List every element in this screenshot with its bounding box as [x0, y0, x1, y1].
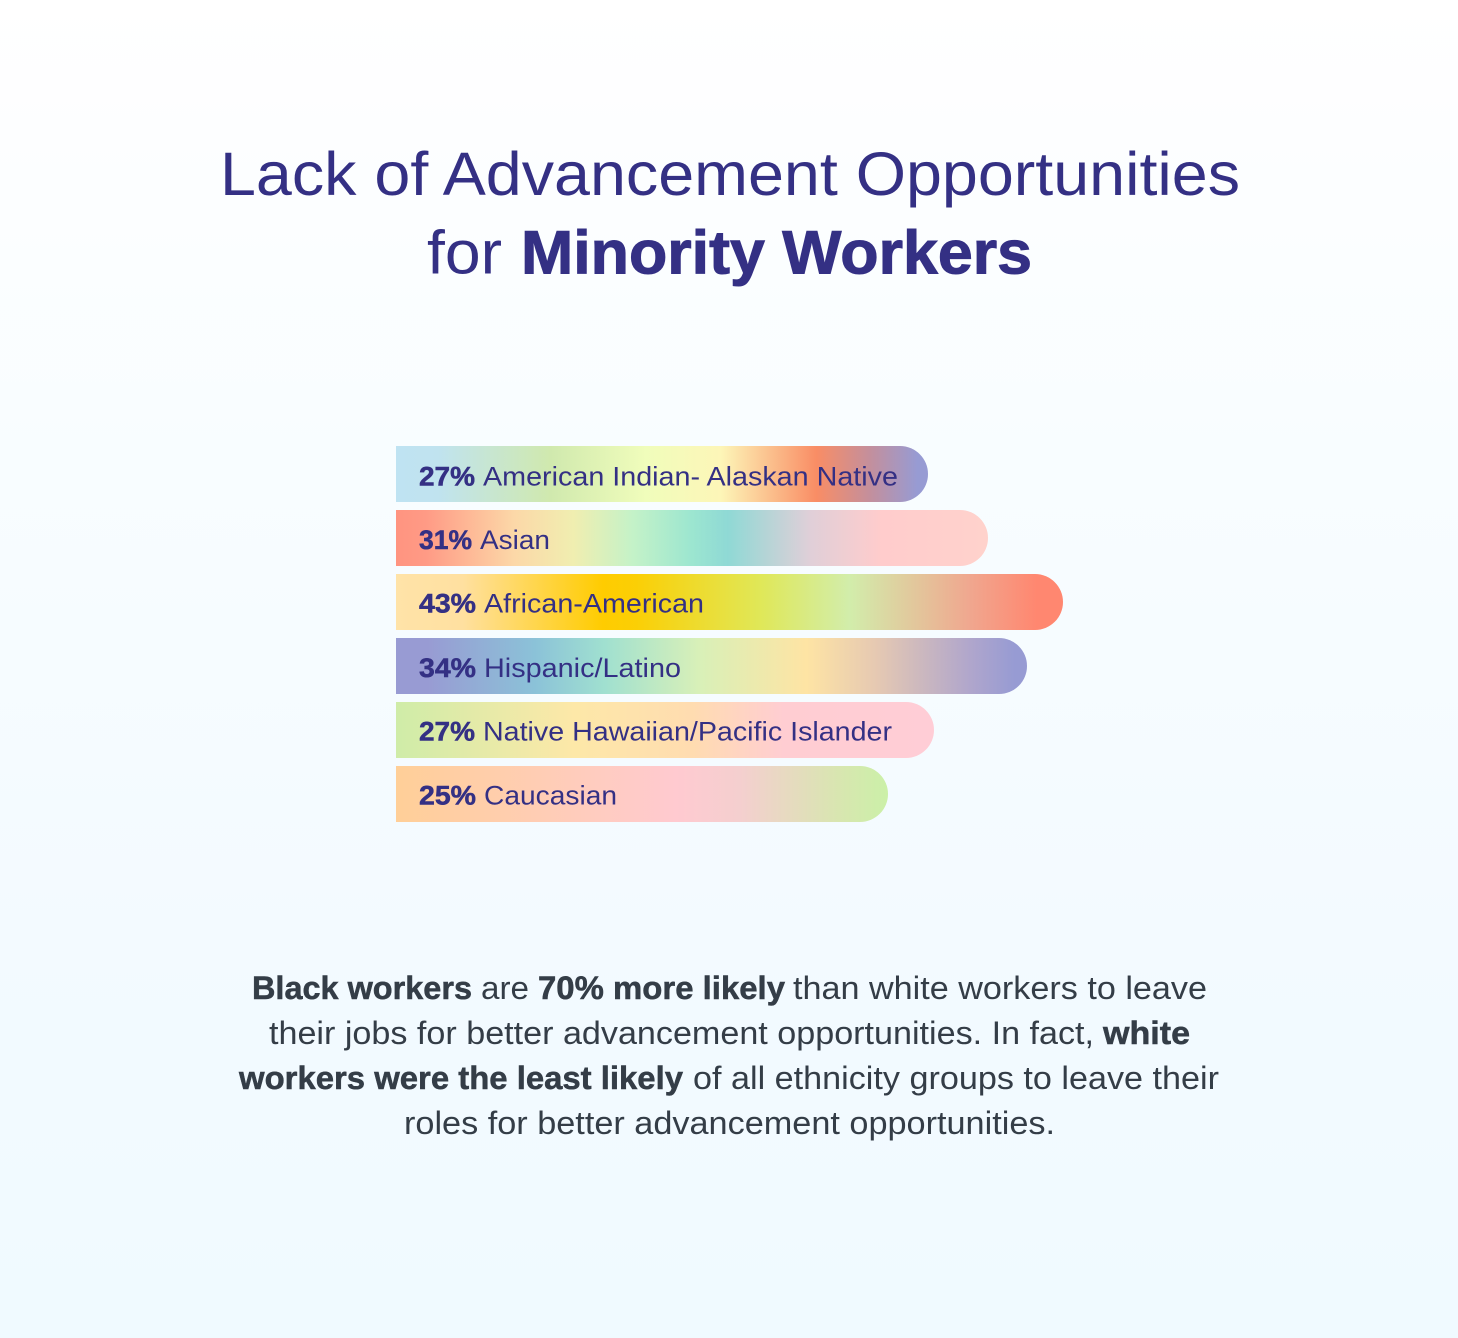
title: Lack of Advancement Opportunities — [220, 140, 1240, 208]
bar: Native Hawaiian/Pacific Islander 27% — [396, 702, 934, 758]
title: for — [427, 218, 502, 286]
bar: African-American 43%: African-American — [484, 588, 704, 618]
body text: than white workers to leave — [793, 970, 1207, 1006]
bar: Hispanic/Latino 34%: 34% — [419, 653, 476, 683]
body text: their jobs for better advancement opportunities. In fact, — [269, 1015, 1094, 1051]
bar: Asian 31%: Asian — [480, 525, 550, 555]
bar: American Indian- Alaskan Native 27% — [396, 446, 928, 502]
bar: Caucasian 25%: Caucasian — [484, 780, 617, 810]
body text: are — [481, 970, 529, 1006]
bar: American Indian- Alaskan Native 27%: 27% — [419, 462, 475, 492]
bar: Hispanic/Latino 34%: Hispanic/Latino — [484, 653, 681, 683]
body text: roles for better advancement opportunities. — [404, 1105, 1055, 1141]
bar: Asian 31%: 31% — [419, 525, 472, 555]
body text: Black workers — [252, 970, 472, 1006]
bar: Native Hawaiian/Pacific Islander 27%: 27% — [419, 716, 475, 746]
body text: white — [1102, 1015, 1190, 1051]
bar: African-American 43%: 43% — [419, 588, 476, 618]
body text — [238, 970, 1219, 1141]
bar: Hispanic/Latino 34% — [396, 638, 1027, 694]
bar chart — [396, 446, 1063, 822]
body text: 70% more likely — [538, 970, 785, 1006]
bar: Native Hawaiian/Pacific Islander 27%: Native Hawaiian/Pacific Islander — [483, 716, 892, 746]
body text: workers were the least likely — [238, 1060, 683, 1096]
bar: Asian 31% — [396, 510, 988, 566]
bar: Caucasian 25% — [396, 766, 888, 822]
title: Minority Workers — [521, 218, 1032, 286]
bar: African-American 43% — [396, 574, 1063, 630]
bar: American Indian- Alaskan Native 27%: American Indian- Alaskan Native — [483, 462, 898, 492]
bar: Caucasian 25%: 25% — [419, 780, 476, 810]
body text: of all ethnicity groups to leave their — [693, 1060, 1219, 1096]
title — [220, 140, 1240, 286]
